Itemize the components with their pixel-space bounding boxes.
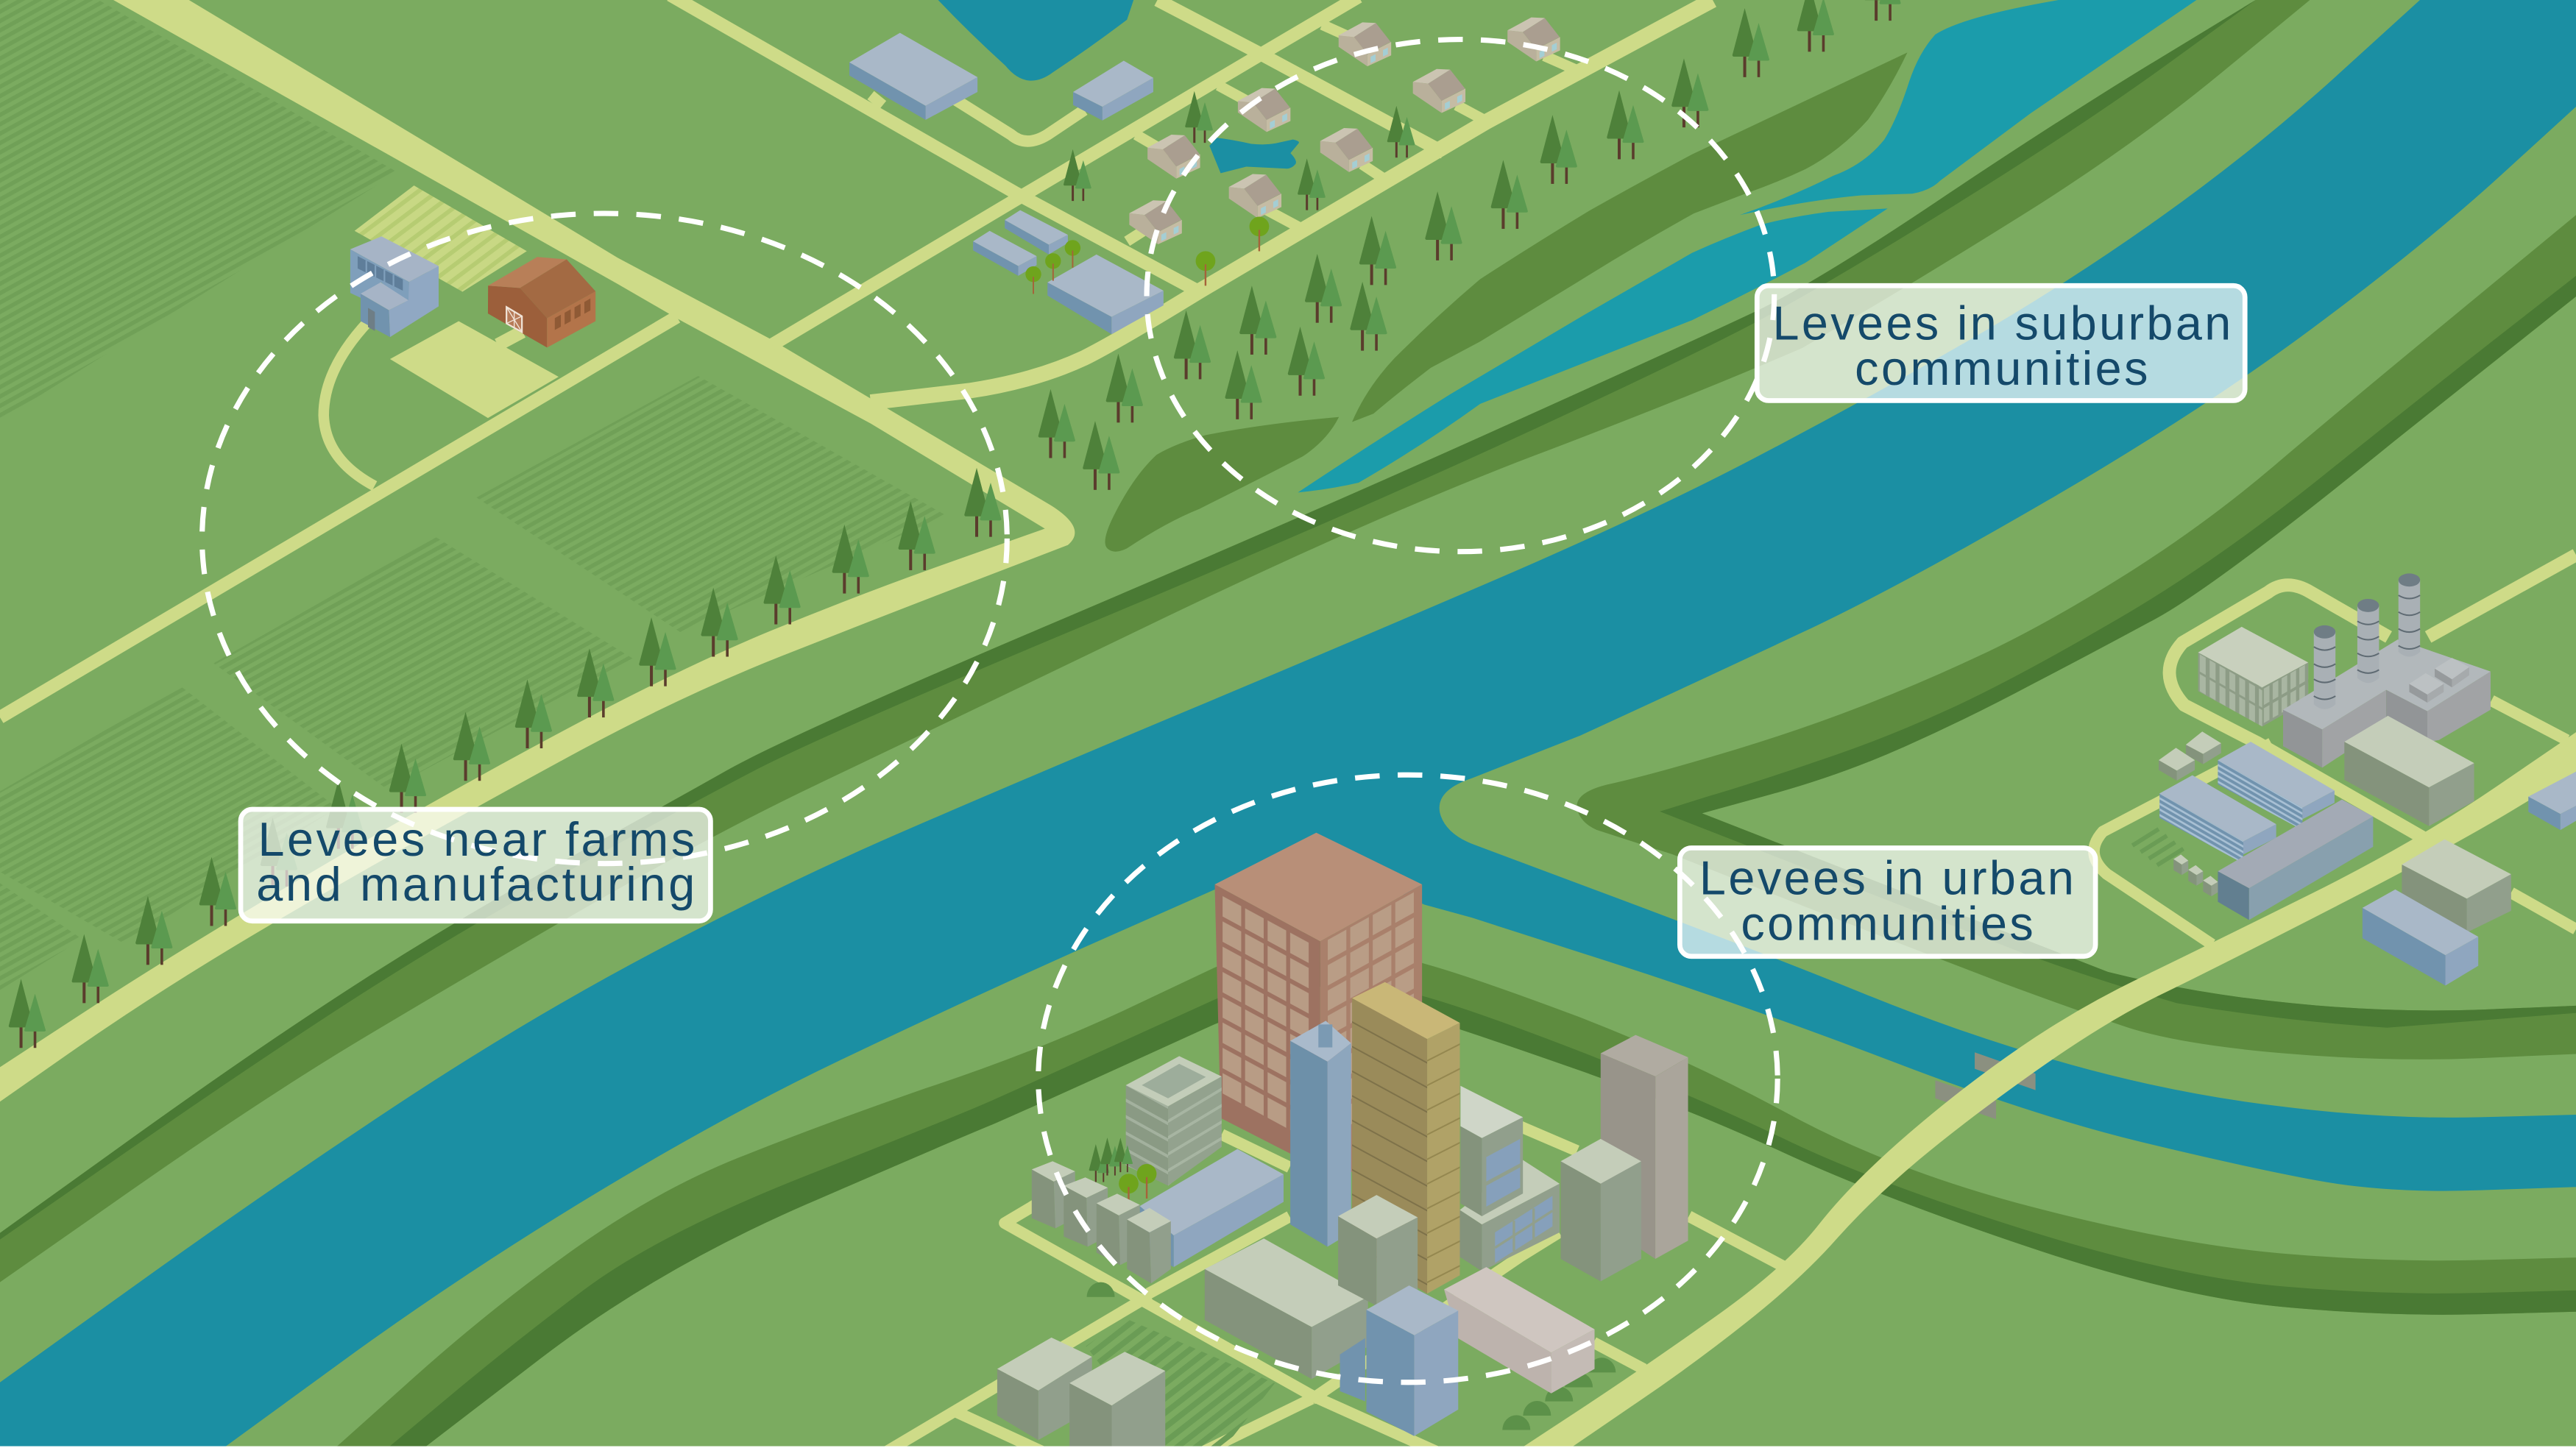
urban cluster: [997, 833, 1688, 1448]
bridge piers: [1935, 1052, 2036, 1119]
south levee: [335, 928, 2576, 1448]
green box: [2402, 840, 2511, 932]
blue striped block two: [2159, 776, 2276, 864]
small blue building: [1340, 1338, 1365, 1402]
bottom left buildings: [997, 1338, 1165, 1448]
blue tower: [1290, 1021, 1351, 1246]
green mid tower: [1338, 1195, 1418, 1306]
chimneys: [2314, 573, 2420, 709]
callout: urban: [1680, 848, 2095, 957]
pond: [938, 0, 1133, 81]
green low building: [1205, 1238, 1368, 1379]
wetland patches: [1105, 52, 1908, 552]
tan tall tower: [1601, 1035, 1688, 1259]
grey striped tower: [1126, 1056, 1222, 1185]
red tower: [1214, 833, 1422, 1182]
windowed low buildings: [1459, 1086, 1560, 1271]
north levee: [0, 0, 2310, 1282]
green tall tower: [1561, 1139, 1641, 1282]
urban park trees: [1089, 1138, 1156, 1208]
suburban conifers: [1038, 0, 1901, 490]
bottom edge: [0, 1447, 2576, 1448]
yellow field: [355, 185, 527, 292]
main levee road: [0, 0, 1075, 1101]
deciduous trees: [1025, 217, 1269, 294]
callout: farms: and manufacturing: [256, 857, 695, 911]
blue striped block one: [2218, 742, 2335, 830]
urban field: [1086, 1319, 1275, 1448]
bushes: [1087, 1282, 1616, 1430]
road network north: [0, 0, 1713, 1101]
mini field: [2132, 829, 2184, 865]
callout: suburban: [1757, 285, 2245, 400]
right edge blue building: [2528, 772, 2576, 830]
dashed circle: urban: [1038, 775, 1777, 1383]
callout: urban: communities: [1741, 896, 2034, 950]
levee road conifers: [9, 468, 1001, 1048]
side channels: [1298, 0, 2196, 492]
bridge road: [1521, 732, 2576, 1448]
power plant: [2283, 639, 2491, 767]
dashed circle: suburban: [1147, 40, 1774, 552]
callout: farms: [241, 809, 710, 921]
dashed circle: farms: [202, 213, 1007, 864]
farm yard: [390, 321, 559, 418]
callout: urban: Levees in urban: [1699, 851, 2074, 905]
blue box: [2363, 890, 2478, 985]
houses: [1129, 18, 1560, 244]
suburban warehouses: [849, 33, 1164, 334]
glass building: [2198, 627, 2308, 726]
road network south: [887, 555, 2576, 1448]
callout: suburban: communities: [1855, 341, 2148, 395]
callout: farms: Levees near farms: [258, 812, 695, 866]
east levee: [1577, 215, 2576, 1060]
blue front tower: [1366, 1285, 1458, 1436]
pink long building: [1444, 1267, 1595, 1394]
grey-blue long block: [2218, 800, 2373, 920]
small pond: [1209, 138, 1299, 173]
crop fields: [0, 0, 946, 990]
barn: [488, 257, 595, 347]
farm roads: [0, 317, 677, 717]
suburban roads: [670, 0, 1713, 402]
small towers: [1032, 1161, 1171, 1283]
urban roads: [887, 1126, 1785, 1448]
farm building: [350, 236, 439, 337]
grey-green warehouse: [2344, 716, 2474, 826]
factory complex: [2132, 573, 2576, 985]
gold tower: [1352, 982, 1459, 1293]
small storage boxes: [2159, 731, 2221, 896]
factory roads: [2094, 555, 2576, 945]
blue long building: [1140, 1149, 1284, 1267]
callout: suburban: Levees in suburban: [1772, 297, 2231, 350]
